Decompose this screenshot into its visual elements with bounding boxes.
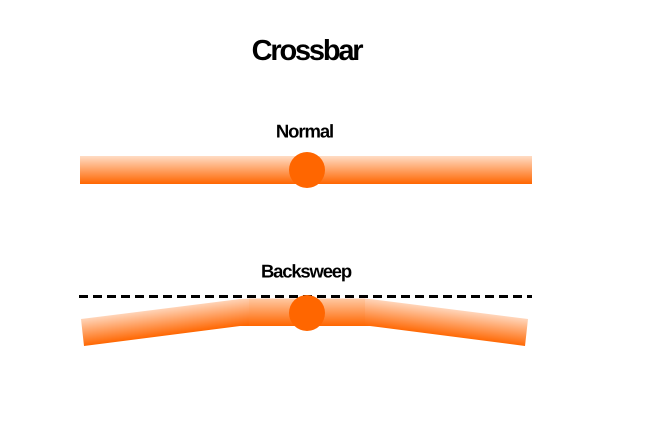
center clamp circle [289,152,325,188]
heading: normal: Normal [276,120,333,142]
straight bar [80,156,532,184]
center segment [249,298,365,326]
left swept segment [81,298,250,346]
reference dashed line [79,295,532,298]
normal crossbar diagram [80,152,532,188]
right swept segment [364,298,528,346]
title: Crossbar [252,35,363,67]
heading: backsweep: Backsweep [261,260,352,282]
center clamp circle [289,295,325,331]
backsweep crossbar diagram [79,295,532,346]
